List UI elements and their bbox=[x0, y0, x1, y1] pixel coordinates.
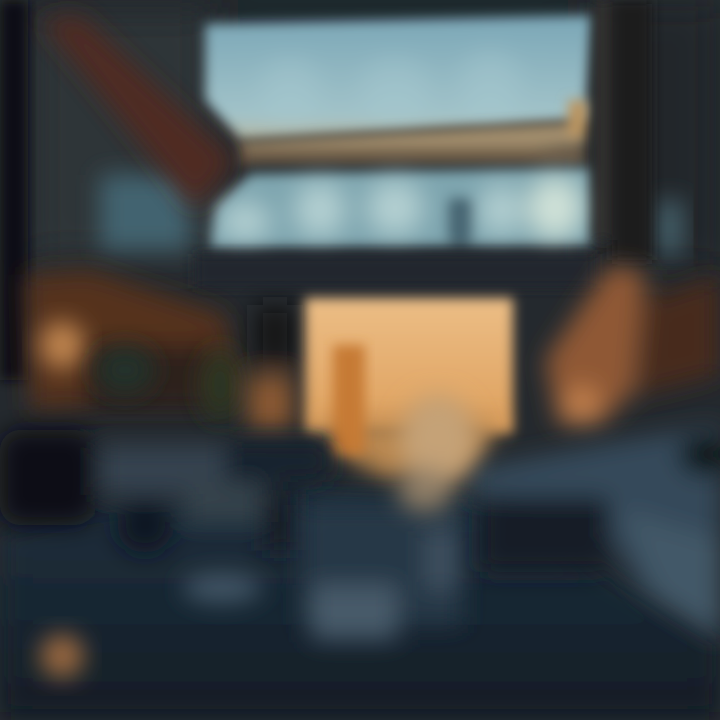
lower doorway glow bbox=[315, 420, 505, 480]
floor bbox=[0, 490, 720, 720]
wall between plants and door bbox=[248, 305, 295, 430]
warm lit doorway bbox=[305, 298, 513, 433]
plants bbox=[95, 346, 240, 421]
glass table bbox=[182, 505, 462, 640]
right sofa bbox=[470, 425, 720, 640]
left dark column bbox=[0, 0, 28, 380]
left dark armchair and seating bbox=[0, 430, 330, 553]
diagonal timber beam bbox=[40, 15, 235, 210]
right wooden wall bbox=[545, 265, 720, 425]
right blue window bbox=[657, 200, 683, 255]
left wood wall bbox=[25, 270, 240, 410]
upper wall haze bbox=[0, 0, 720, 270]
right dark column bbox=[596, 0, 652, 260]
upper window bbox=[205, 15, 592, 140]
left blue window bbox=[100, 175, 190, 250]
seated figure bbox=[397, 394, 476, 512]
small orange floor glow bbox=[40, 634, 84, 678]
dark lintel beam bbox=[195, 254, 595, 288]
amber window band bbox=[240, 100, 590, 165]
table lamp glow bbox=[40, 321, 84, 369]
darker orange door panel bbox=[333, 345, 365, 455]
lower window bbox=[210, 168, 590, 248]
